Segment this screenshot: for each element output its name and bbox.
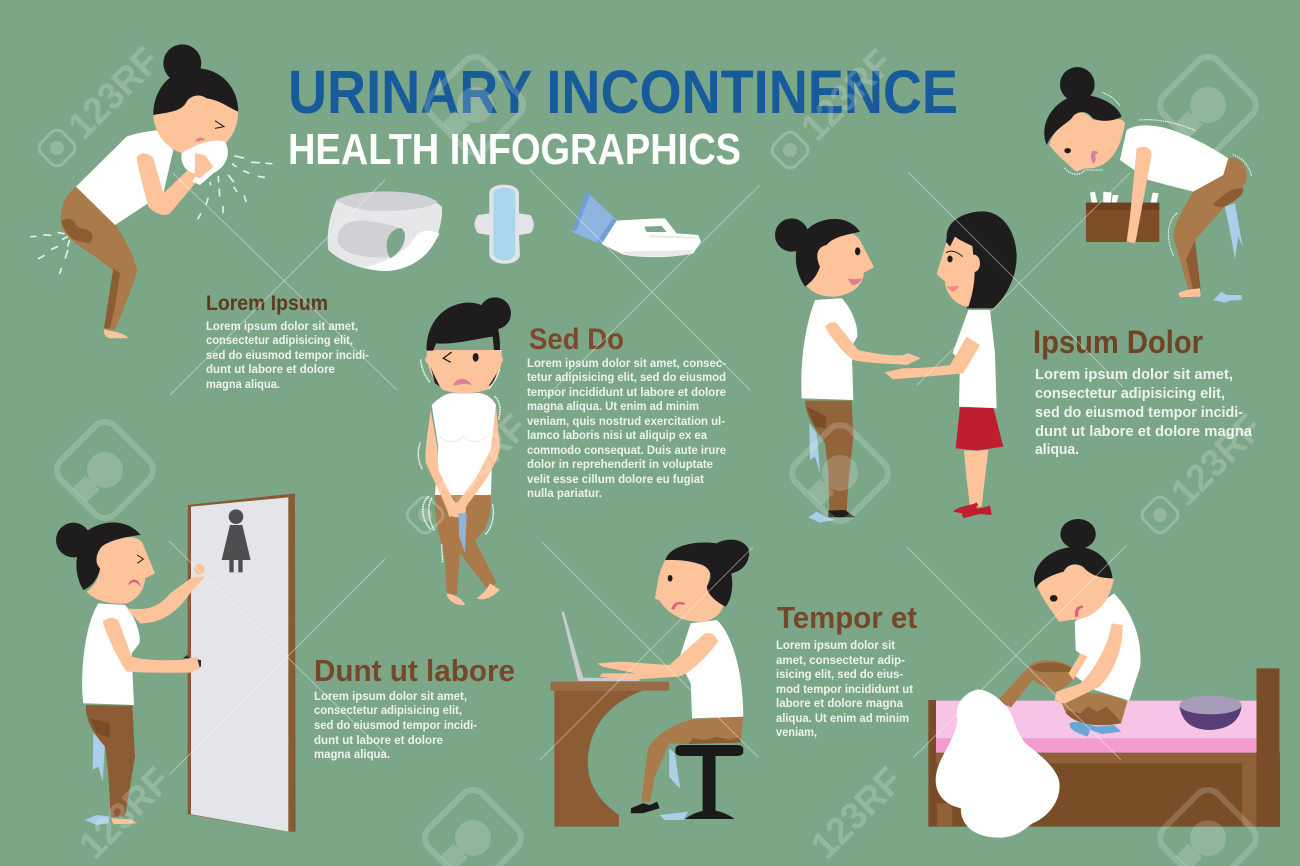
figure: woman lifting box — [1044, 67, 1252, 303]
watermark: logos with text: 123RF — [429, 407, 536, 514]
figure: friend in red skirt — [884, 211, 1017, 518]
heading: Dunt ut labore: Dunt ut labore — [314, 653, 515, 688]
text block: Ipsum Dolor: dunt ut labore et dolore magna — [1035, 424, 1253, 440]
desk — [551, 682, 669, 827]
text block: Dunt ut labore: dunt ut labore et dolore — [314, 733, 443, 747]
text block: Sed Do: commodo consequat. Duis aute irure — [527, 443, 726, 457]
icon: urinal bottle — [572, 192, 701, 257]
text block: Tempor et: amet, consectetur adip- — [776, 653, 905, 667]
watermark: logos with text: 123RF — [804, 760, 911, 866]
text block: Lorem Ipsum: consectetur adipisicing elit, — [206, 333, 353, 347]
heading: Tempor et: Tempor et — [777, 600, 917, 635]
text block: Ipsum Dolor: Lorem ipsum dolor sit amet, — [1035, 367, 1233, 383]
text block: Ipsum Dolor: sed do eiusmod tempor incidi- — [1035, 405, 1243, 421]
bowl — [1179, 696, 1242, 730]
text block: Dunt ut labore: sed do eiusmod tempor incidi- — [314, 718, 477, 732]
figure: woman at door — [56, 522, 205, 825]
icon: women's restroom sign — [222, 509, 251, 572]
text block: Dunt ut labore — [314, 689, 477, 761]
text block: Sed Do: nulla pariatur. — [527, 486, 602, 500]
door with toilet sign — [183, 493, 296, 832]
text block: Tempor et: mod tempor incididunt ut — [776, 682, 913, 696]
watermark: logos with text: 123RF — [61, 40, 168, 147]
icon: diaper — [328, 191, 442, 271]
text block: Sed Do: velit esse cillum dolore eu fugiat — [527, 472, 704, 486]
text block: Ipsum Dolor: consectetur adipisicing elit, — [1035, 386, 1225, 402]
text block: Lorem Ipsum: magna aliqua. — [206, 377, 280, 391]
text block: Ipsum Dolor: aliqua. — [1035, 442, 1079, 458]
text block: Tempor et: aliqua. Ut enim ad minim — [776, 711, 909, 725]
text block: Dunt ut labore: magna aliqua. — [314, 747, 390, 761]
text block: Tempor et: isicing elit, sed do eius- — [776, 667, 903, 681]
text block: Sed Do: dolor in reprehenderit in voluptate — [527, 457, 713, 471]
text block: Tempor et — [776, 638, 913, 739]
white blanket — [936, 689, 1060, 838]
text block: Tempor et: veniam, — [776, 725, 817, 739]
stool — [675, 745, 743, 819]
heading: Lorem Ipsum: Lorem Ipsum — [206, 292, 328, 315]
text block: Tempor et: labore et dolore magna — [776, 696, 903, 710]
figure: woman holding crotch — [418, 297, 511, 605]
watermark: logos with text: 123RF — [1164, 407, 1271, 514]
text block: Lorem Ipsum: Lorem ipsum dolor sit amet, — [206, 319, 358, 333]
text block: Tempor et: Lorem ipsum dolor sit — [776, 638, 895, 652]
text block: Sed Do — [527, 356, 726, 500]
watermark: logos with text: 123RF — [794, 42, 901, 149]
watermark: logos with text: 123RF — [72, 760, 179, 866]
text block: Sed Do: tempor incididunt ut labore et dolore — [527, 385, 726, 399]
text block: Dunt ut labore: Lorem ipsum dolor sit amet, — [314, 689, 467, 703]
bed — [928, 668, 1280, 827]
text block: Sed Do: veniam, quis nostrud exercitation ul- — [527, 414, 725, 428]
heading: Ipsum Dolor: Ipsum Dolor — [1033, 324, 1203, 360]
figure: woman sneezing — [31, 44, 272, 338]
title: URINARY INCONTINENCE — [288, 58, 958, 126]
text block: Dunt ut labore: consectetur adipisicing elit, — [314, 703, 462, 717]
text block: Lorem Ipsum: sed do eiusmod tempor incidi- — [206, 348, 369, 362]
text block: Sed Do: Lorem ipsum dolor sit amet, consec- — [527, 356, 726, 370]
text block: Lorem Ipsum: dunt ut labore et dolore — [206, 362, 335, 376]
text block: Sed Do: magna aliqua. Ut enim ad minim — [527, 399, 699, 413]
laptop — [562, 612, 639, 681]
figure: woman at desk with laptop — [551, 540, 749, 827]
text block: Ipsum Dolor — [1035, 367, 1253, 458]
subtitle: HEALTH INFOGRAPHICS — [288, 125, 741, 174]
text block: Lorem Ipsum — [206, 319, 369, 391]
watermark crossing lines — [169, 170, 1130, 775]
figure: woman with wet trousers greeting — [775, 218, 921, 523]
text block: Sed Do: tetur adipisicing elit, sed do eiusmod — [527, 370, 726, 384]
heading: Sed Do: Sed Do — [529, 323, 624, 356]
icon: sanitary pad — [475, 185, 534, 264]
text block: Sed Do: lamco laboris nisi ut aliquip ex ea — [527, 428, 707, 442]
figure: woman on bed with wet sheets — [928, 519, 1280, 838]
